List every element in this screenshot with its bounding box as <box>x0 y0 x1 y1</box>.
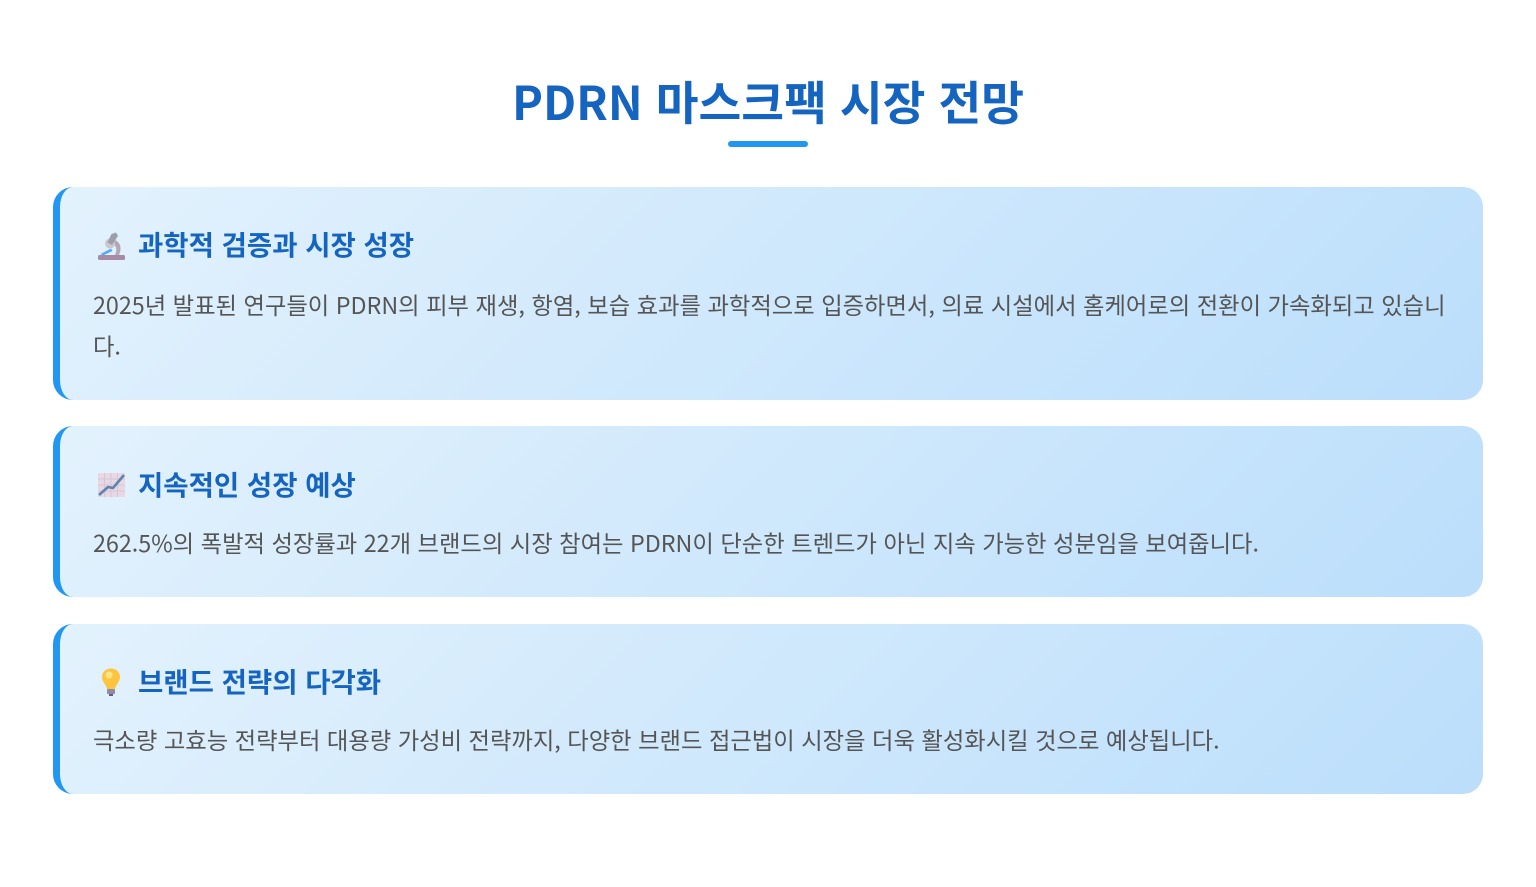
heading: 지속적인 성장 예상 <box>138 463 356 503</box>
body text: 262.5%의 폭발적 성장률과 22개 브랜드의 시장 참여는 PDRN이 단순한 트렌드가 아닌 지속 가능한 성분임을 보여줍니다. <box>93 525 1259 559</box>
icon: microscope <box>98 232 125 260</box>
heading: 과학적 검증과 시장 성장 <box>138 223 414 263</box>
body text: 2025년 발표된 연구들이 PDRN의 피부 재생, 항염, 보습 효과를 과학적으로 입증하면서, 의료 시설에서 홈케어로의 전환이 가속화되고 있습니다. <box>93 287 1446 362</box>
panel: scientific validation <box>53 187 1483 400</box>
panel: brand strategy <box>53 624 1483 794</box>
icon: light bulb <box>102 668 120 696</box>
title: PDRN 마스크팩 시장 전망 <box>512 67 1024 134</box>
panel: sustained growth <box>53 426 1483 597</box>
body text: 극소량 고효능 전략부터 대용량 가성비 전략까지, 다양한 브랜드 접근법이 시장을 더욱 활성화시킬 것으로 예상됩니다. <box>93 722 1220 756</box>
icon: chart <box>98 473 125 497</box>
title underline <box>728 141 808 147</box>
heading: 브랜드 전략의 다각화 <box>138 660 381 700</box>
